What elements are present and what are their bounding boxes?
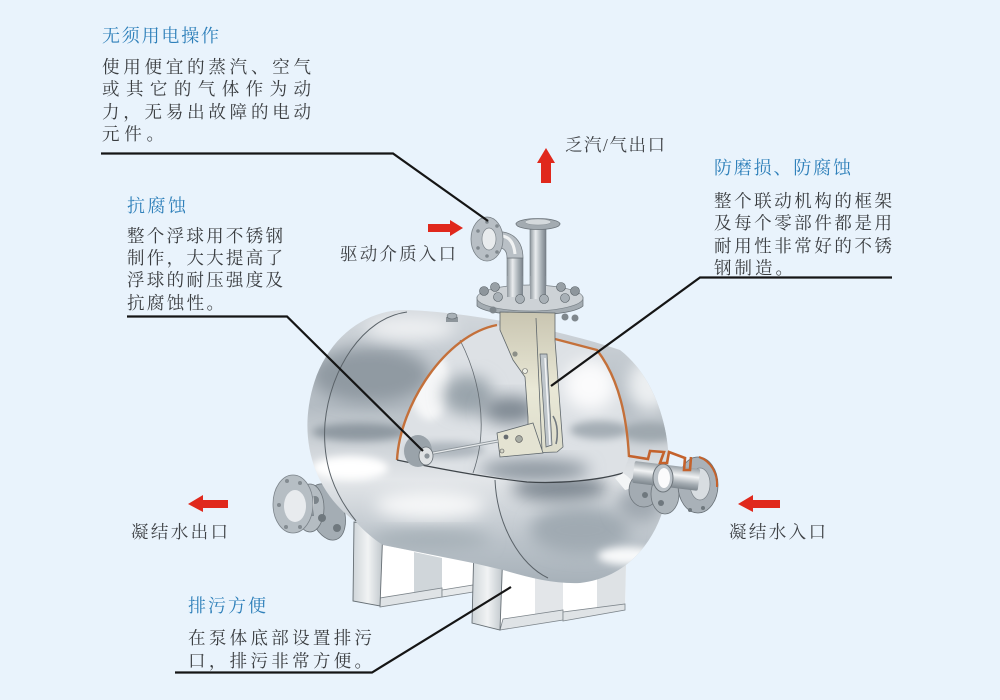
callout: corrosion resistance: 整个浮球用不锈钢 bbox=[127, 226, 283, 246]
callout: easy blowdown bbox=[188, 596, 372, 671]
top bolt on tank bbox=[446, 313, 458, 322]
callout: wear and corrosion resistance: 防磨损、防腐蚀 bbox=[714, 158, 852, 178]
callout: wear and corrosion resistance: 钢制造。 bbox=[714, 258, 793, 278]
tank body with reflections bbox=[307, 310, 680, 583]
callout: wear and corrosion resistance bbox=[714, 158, 892, 278]
label: exhaust steam outlet: 乏汽/气出口 bbox=[565, 135, 665, 155]
cutaway interior with orange section edge bbox=[397, 325, 630, 483]
callout: easy blowdown: 口，排污非常方便。 bbox=[188, 651, 372, 671]
main mounting flange with bolts bbox=[477, 276, 583, 322]
callout: no electricity needed: 元件。 bbox=[102, 124, 164, 144]
arrow: exhaust steam out bbox=[537, 148, 555, 183]
callout: corrosion resistance bbox=[127, 196, 284, 313]
label: condensate outlet: 凝结水出口 bbox=[131, 522, 228, 542]
leader lines bbox=[101, 154, 892, 672]
callout: no electricity needed: 使用便宜的蒸汽、空气 bbox=[102, 57, 312, 77]
left outlet nozzle: condensate outlet bbox=[273, 475, 352, 545]
callout: wear and corrosion resistance: 耐用性非常好的不锈 bbox=[714, 236, 892, 256]
label: condensate inlet: 凝结水入口 bbox=[729, 522, 826, 542]
right inlet nozzle: condensate inlet bbox=[615, 451, 718, 514]
callout: no electricity needed: 力，无易出故障的电动 bbox=[102, 102, 311, 122]
arrow: condensate in bbox=[738, 495, 780, 512]
callout: no electricity needed: 或其它的气体作为动 bbox=[102, 79, 311, 99]
callout: corrosion resistance: 抗腐蚀性。 bbox=[127, 293, 224, 313]
arrow: drive medium in bbox=[428, 220, 463, 236]
float ball and lever arm bbox=[404, 435, 498, 467]
infographic: pump tank diagram with callouts bbox=[101, 26, 892, 674]
callout: no electricity needed: 无须用电操作 bbox=[102, 26, 219, 46]
callout: corrosion resistance: 浮球的耐压强度及 bbox=[127, 270, 284, 290]
callout: wear and corrosion resistance: 及每个零部件都是用 bbox=[714, 213, 892, 233]
arrow: condensate out bbox=[188, 495, 228, 512]
callout: corrosion resistance: 抗腐蚀 bbox=[127, 196, 187, 216]
linkage mechanism bracket bbox=[497, 312, 563, 457]
support saddles bbox=[353, 522, 626, 630]
callout: corrosion resistance: 制作，大大提高了 bbox=[127, 248, 283, 268]
callout: easy blowdown: 在泵体底部设置排污 bbox=[188, 628, 372, 648]
label: drive medium inlet: 驱动介质入口 bbox=[340, 244, 456, 264]
callout: no electricity needed bbox=[102, 26, 312, 144]
steam pipes and drive medium inlet flange bbox=[471, 217, 560, 298]
callout: easy blowdown: 排污方便 bbox=[188, 596, 266, 616]
callout: wear and corrosion resistance: 整个联动机构的框架 bbox=[714, 191, 892, 211]
